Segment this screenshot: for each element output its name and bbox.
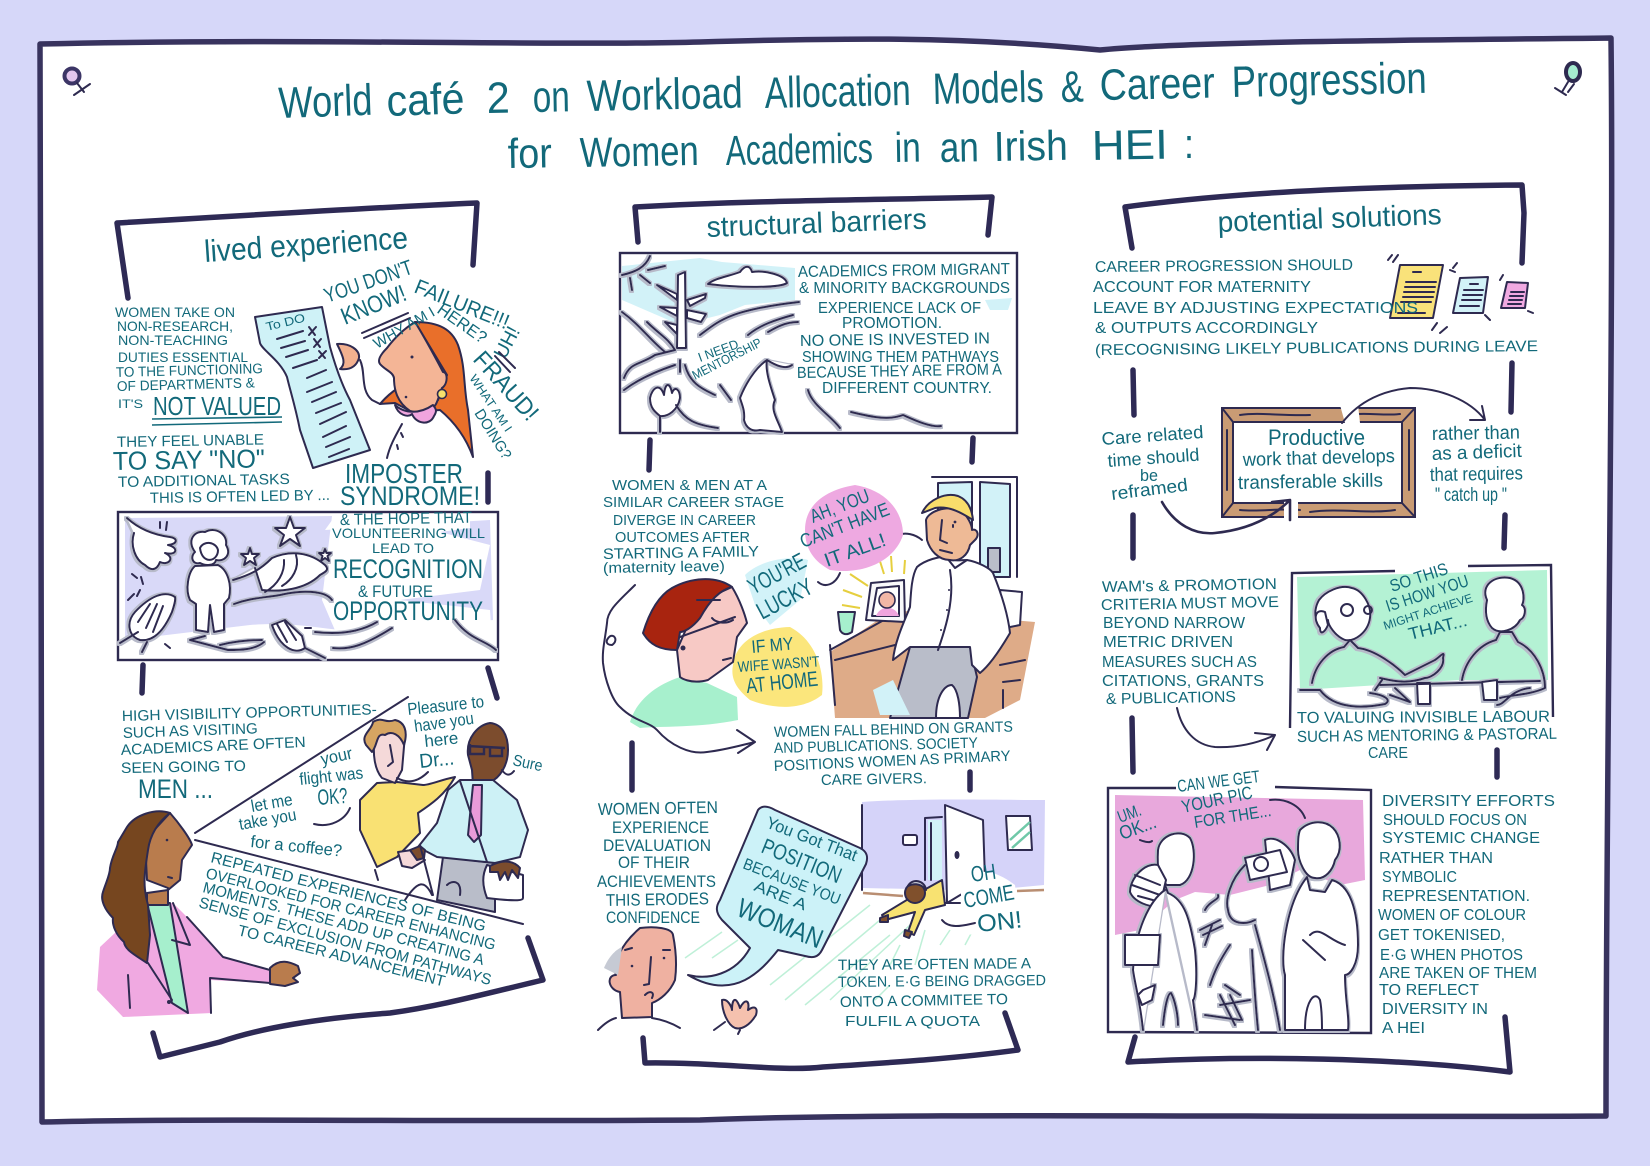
speech: you're lucky: YOU'RE (743, 547, 810, 599)
text block: high visibility: SEEN GOING TO (121, 758, 246, 777)
column bracket: structural barriers (632, 197, 1018, 1068)
text block: diversity efforts: DIVERSITY IN (1382, 1001, 1488, 1018)
text block: imposter syndrome: SYNDROME! (340, 481, 480, 511)
text block: diversity efforts: REPRESENTATION. (1382, 888, 1530, 905)
text block: career divergence: SIMILAR CAREER STAGE (603, 494, 784, 511)
text block: migrant academics: EXPERIENCE LACK OF (818, 300, 981, 317)
illustration: token scene: OH (969, 859, 997, 887)
text block: diversity efforts: A HEI (1382, 1020, 1425, 1037)
text block: high visibility: MEN ... (138, 774, 213, 804)
text block: women fall behind (773, 719, 1013, 789)
text block: devaluation: WOMEN OFTEN (598, 798, 718, 819)
text block: devaluation: CONFIDENCE (606, 908, 700, 927)
text block: diversity efforts: RATHER THAN (1379, 850, 1493, 867)
text block: token (838, 955, 1046, 1030)
text block: token: TOKEN. E·G BEING DRAGGED (838, 972, 1046, 991)
text block: migrant academics: DIFFERENT COUNTRY. (822, 380, 992, 397)
title: Academics (725, 124, 873, 174)
text block: WAMs and promotion: & PUBLICATIONS (1106, 689, 1236, 708)
text block: care related (1101, 422, 1204, 504)
text block: token: THEY ARE OFTEN MADE A (838, 955, 1031, 974)
illustration: woman with glasses (603, 579, 755, 753)
text block: diversity efforts: TO REFLECT (1379, 982, 1479, 999)
text block: WAMs and promotion: CITATIONS, GRANTS (1102, 673, 1264, 690)
text block: non-research duties: NOT VALUED (153, 391, 281, 421)
text block: diversity efforts: WOMEN OF COLOUR (1378, 907, 1526, 924)
text block: diversity efforts: GET TOKENISED, (1378, 927, 1505, 944)
text block: unable to say no: TO SAY "NO" (113, 443, 265, 476)
text block: imposter syndrome: IMPOSTER (345, 458, 463, 489)
text block: diversity efforts: ARE TAKEN OF THEM (1379, 965, 1537, 982)
text block: WAMs and promotion: WAM's & PROMOTION (1102, 576, 1277, 596)
text block: women fall behind: CARE GIVERS. (821, 770, 927, 789)
text block: repeated experiences: OVERLOOKED FOR CAREER ENHANCING (204, 865, 497, 954)
text block: diversity efforts: SYMBOLIC (1382, 869, 1457, 886)
panel: potential solutions (1093, 185, 1557, 1072)
text block: diversity efforts: SHOULD FOCUS ON (1383, 812, 1527, 829)
text block: hope of recognition (332, 510, 485, 626)
illustration: woman with long hair (97, 811, 300, 1017)
text block: non-research duties (115, 304, 282, 425)
men's speech: Dr... (418, 747, 455, 773)
illustration: wooden frame: work that develops (1242, 446, 1395, 471)
title: : (1184, 120, 1194, 167)
illustration: man with raised hand (598, 927, 757, 1034)
illustration panel: mentorship signpost: I NEED (696, 336, 740, 365)
text block: hope of recognition: VOLUNTEERING WILL (332, 525, 485, 541)
text block: care related: be (1140, 466, 1158, 485)
speech: ah you can't have it all (797, 485, 903, 572)
text block: migrant academics (797, 261, 1010, 397)
text block: devaluation (597, 798, 718, 927)
panel: lived experience (97, 203, 544, 1057)
illustration panel: volunteering hands (118, 512, 498, 660)
panel: structural barriers (597, 197, 1046, 1068)
text block: repeated experiences: REPEATED EXPERIENCES OF BEING (209, 849, 488, 935)
illustration: woman with red hair (379, 322, 473, 458)
speech: if my wife wasn't at home (732, 627, 823, 707)
text block: hope of recognition: RECOGNITION (333, 554, 483, 584)
text block: diversity efforts (1378, 793, 1555, 1037)
men's speech: take you (237, 805, 298, 834)
text block: career divergence (603, 477, 784, 577)
thought words around head: KNOW! (337, 280, 410, 331)
title: Models (932, 63, 1044, 114)
title: Women (579, 127, 699, 176)
illustration: office man and desk (830, 477, 1035, 718)
text block: devaluation: THIS ERODES (606, 889, 709, 910)
text block: token: FULFIL A QUOTA (845, 1013, 980, 1030)
illustration panel: photo for diversity: CAN WE GET (1176, 767, 1261, 796)
speech: ah you can't have it all: CAN'T HAVE (797, 499, 893, 553)
speech bubble: you got that position: WOMAN (733, 893, 827, 954)
text block: maternity leave: ACCOUNT FOR MATERNITY (1093, 279, 1311, 296)
text block: migrant academics: PROMOTION. (842, 315, 942, 332)
thought words around head: FAILURE!!! (411, 275, 512, 334)
men's speech: for a coffee? (250, 832, 343, 861)
title: & (1060, 63, 1084, 112)
thought words around head: WHY AM I (370, 304, 438, 352)
text block: hope of recognition: & THE HOPE THAT (340, 510, 472, 529)
text block: unable to say no: THEY FEEL UNABLE (117, 431, 264, 451)
text block: migrant academics: BECAUSE THEY ARE FROM A (797, 361, 1002, 382)
illustration: token scene (685, 800, 1045, 1005)
column bracket: lived experience (117, 203, 543, 1057)
text block: non-research duties: NON-TEACHING (118, 332, 228, 348)
text block: maternity leave: LEAVE BY ADJUSTING EXPECTATIONS (1093, 300, 1418, 317)
thought words around head (321, 256, 544, 463)
arrow: to valuing invisible labour (1177, 708, 1275, 750)
title: Allocation (764, 66, 911, 118)
speech bubble: you got that position (688, 807, 867, 985)
text block: migrant academics: SHOWING THEM PATHWAYS (802, 349, 999, 366)
text block: devaluation: DEVALUATION (603, 836, 711, 855)
text block: non-research duties: TO THE FUNCTIONING (116, 360, 263, 380)
text block: care related: time should (1107, 445, 1200, 471)
text block: care related: reframed (1110, 475, 1189, 504)
illustration panel: mentorship signpost: MENTORSHIP (690, 335, 764, 383)
text block: WAMs and promotion: METRIC DRIVEN (1103, 634, 1233, 651)
text block: migrant academics: & MINORITY BACKGROUNDS (799, 280, 1010, 297)
text block: repeated experiences: MOMENTS. THESE ADD UP CREATING A (201, 879, 487, 969)
text block: high visibility (120, 701, 377, 804)
title: World (278, 76, 373, 128)
text block: non-research duties: NON-RESEARCH, (117, 318, 233, 334)
text block: WAMs and promotion: BEYOND NARROW (1103, 615, 1245, 632)
thought words around head: UH! (490, 323, 525, 362)
text block: career divergence: OUTCOMES AFTER (615, 529, 750, 546)
title: Workload (586, 69, 743, 121)
text block: migrant academics: NO ONE IS INVESTED IN (800, 330, 990, 350)
text block: devaluation: OF THEIR (618, 853, 690, 872)
title: Career (1099, 59, 1215, 110)
title: 2 (486, 74, 510, 123)
text block: maternity leave: & OUTPUTS ACCORDINGLY (1095, 320, 1318, 337)
men's speech: have you (413, 709, 475, 736)
text block: migrant academics: ACADEMICS FROM MIGRANT (798, 261, 1010, 281)
text block: token: ONTO A COMMITEE TO (840, 991, 1008, 1011)
title: HEI (1091, 121, 1168, 169)
text block: WAMs and promotion: CRITERIA MUST MOVE (1101, 594, 1279, 614)
text block: maternity leave (1093, 257, 1538, 359)
illustration panel: photo for diversity: UM. (1115, 801, 1144, 827)
men's speech: here (423, 729, 459, 751)
illustration panel: photo for diversity: OK... (1117, 812, 1159, 845)
text block: unable to say no: THIS IS OFTEN LED BY ... (150, 487, 330, 507)
text block: non-research duties: WOMEN TAKE ON (115, 304, 235, 320)
thought words around head: DOING? (471, 406, 515, 463)
text block: repeated experiences: TO CAREER ADVANCEMENT (236, 922, 447, 991)
speech: ah you can't have it all: IT ALL! (822, 530, 889, 572)
text block: career divergence: DIVERGE IN CAREER (613, 512, 756, 529)
speech bubble: you got that position: BECAUSE YOU (741, 856, 843, 909)
text block: career divergence: WOMEN & MEN AT A (612, 477, 767, 494)
text block: WAMs and promotion: MEASURES SUCH AS (1102, 654, 1257, 671)
text block: diversity efforts: DIVERSITY EFFORTS (1382, 793, 1555, 810)
speech: if my wife wasn't at home: WIFE WASN'T (737, 653, 820, 676)
men's speech: flight was (298, 763, 364, 789)
illustration panel: mentoring conversation: MIGHT ACHIEVE (1382, 591, 1474, 633)
text block: non-research duties: IT'S (118, 397, 143, 411)
text block: unable to say no: TO ADDITIONAL TASKS (118, 471, 290, 491)
speech: ah you can't have it all: AH, YOU (807, 486, 873, 528)
title: an (939, 123, 979, 171)
text block: women fall behind: POSITIONS WOMEN AS PRIMARY (773, 748, 1011, 775)
speech bubble: you got that position: POSITION (758, 833, 845, 888)
text block: women fall behind: WOMEN FALL BEHIND ON GRANTS (774, 719, 1013, 741)
illustration panel: photo for diversity (1108, 767, 1371, 1033)
text block: hope of recognition: LEAD TO (372, 540, 434, 556)
text block: hope of recognition: OPPORTUNITY (333, 596, 483, 626)
text block: women fall behind: AND PUBLICATIONS. SOCIETY (774, 735, 978, 757)
title: for (507, 129, 552, 177)
text block: rather than deficit: rather than (1432, 422, 1520, 445)
illustration: wooden frame: Productive (1268, 425, 1365, 450)
illustration: to-do list: To DO (264, 311, 307, 334)
illustration panel: mentorship signpost (620, 253, 1017, 433)
icon: right pin (1555, 63, 1580, 95)
text block: imposter syndrome (340, 458, 480, 511)
text block: rather than deficit: as a deficit (1431, 441, 1523, 465)
text block: repeated experiences: SENSE OF EXCLUSION FROM PATHWAYS (197, 894, 493, 989)
illustration panel: mentoring conversation: IS HOW YOU (1383, 571, 1471, 616)
title: Irish (993, 122, 1068, 170)
text block: maternity leave: CAREER PROGRESSION SHOULD (1095, 257, 1353, 276)
men's speech: let me (249, 790, 294, 816)
thought words around head: YOU DON'T (321, 256, 416, 308)
text block: rather than deficit: " catch up " (1435, 485, 1507, 506)
title: Progression (1231, 54, 1427, 107)
arrow: productive to rather than (1342, 388, 1485, 423)
text block: high visibility: SUCH AS VISITING (123, 720, 258, 742)
text block: rather than deficit: that requires (1430, 463, 1523, 486)
text block: non-research duties: DUTIES ESSENTIAL (118, 349, 248, 365)
speech: you're lucky (743, 547, 840, 648)
illustration panel: mentoring conversation: THAT... (1406, 611, 1469, 644)
text block: rather than deficit (1430, 422, 1523, 506)
heading: lived experience: lived experience (203, 220, 409, 269)
text block: devaluation: ACHIEVEMENTS (597, 872, 716, 891)
text block: maternity leave: (RECOGNISING LIKELY PUBLICATIONS DURING LEAVE (1095, 338, 1538, 359)
illustration panel: photo for diversity: FOR THE... (1193, 801, 1273, 832)
text block: valuing invisible labour: CARE (1368, 745, 1408, 762)
men's speech: OK? (317, 783, 348, 810)
text block: repeated experiences (197, 849, 497, 991)
speech bubble: you got that position: You Got That (764, 813, 860, 865)
text block: valuing invisible labour: SUCH AS MENTORING & PASTORAL (1297, 726, 1557, 746)
speech bubble: you got that position: ARE A (752, 878, 809, 914)
illustration: token scene: COME (962, 879, 1016, 913)
illustration: token scene: ON! (976, 906, 1023, 938)
text block: career divergence: (maternity leave) (603, 558, 725, 577)
thought words around head: FRAUD! (468, 346, 544, 426)
illustration panel: mentoring conversation: SO THIS (1387, 559, 1450, 596)
text block: care related: Care related (1101, 422, 1204, 449)
men's speech: Sure (511, 752, 544, 775)
heading: potential solutions: potential solutions (1217, 199, 1442, 239)
illustration: to-do list (255, 307, 380, 468)
vision cone lines (195, 697, 523, 924)
title (278, 54, 1427, 177)
speech: you're lucky: LUCKY (752, 573, 818, 625)
text block: high visibility: ACADEMICS ARE OFTEN (120, 734, 306, 759)
men's speech: your (319, 744, 354, 769)
illustration panel: mentoring conversation (1290, 559, 1553, 728)
title: café (386, 74, 465, 126)
title: in (894, 124, 921, 171)
text block: non-research duties: OF DEPARTMENTS & (117, 374, 256, 394)
men's speech: Pleasure to (406, 692, 485, 719)
speech: if my wife wasn't at home: AT HOME (745, 668, 819, 698)
text block: WAMs and promotion (1101, 576, 1279, 708)
column bracket: potential solutions (1125, 185, 1524, 1072)
text block: devaluation: EXPERIENCE (612, 818, 709, 837)
text block: unable to say no (113, 431, 330, 507)
thought words around head: HERE? (434, 300, 490, 347)
icon: left pin (64, 68, 90, 95)
text block: high visibility: HIGH VISIBILITY OPPORTUNITIES- (122, 701, 377, 725)
speech: if my wife wasn't at home: IF MY (751, 633, 794, 657)
text block: diversity efforts: SYSTEMIC CHANGE (1382, 830, 1540, 847)
text block: career divergence: STARTING A FAMILY (603, 543, 759, 563)
illustration: wooden frame (1222, 405, 1415, 520)
heading: structural barriers: structural barriers (706, 204, 927, 244)
illustration: wooden frame: transferable skills (1238, 470, 1383, 494)
text block: valuing invisible labour: TO VALUING INVISIBLE LABOUR (1297, 709, 1550, 727)
illustration panel: photo for diversity: YOUR PIC (1180, 782, 1254, 817)
text block: diversity efforts: E·G WHEN PHOTOS (1380, 947, 1523, 964)
text block: valuing invisible labour (1297, 709, 1557, 762)
title: on (532, 72, 570, 122)
arrow: reframed to productive (1162, 500, 1290, 533)
thought words around head: WHAT AM I (467, 372, 515, 434)
illustration: two men shaking hands (360, 720, 528, 912)
text block: hope of recognition: & FUTURE (358, 582, 433, 601)
icon: publication papers (1388, 255, 1533, 333)
men's speech (237, 692, 544, 861)
